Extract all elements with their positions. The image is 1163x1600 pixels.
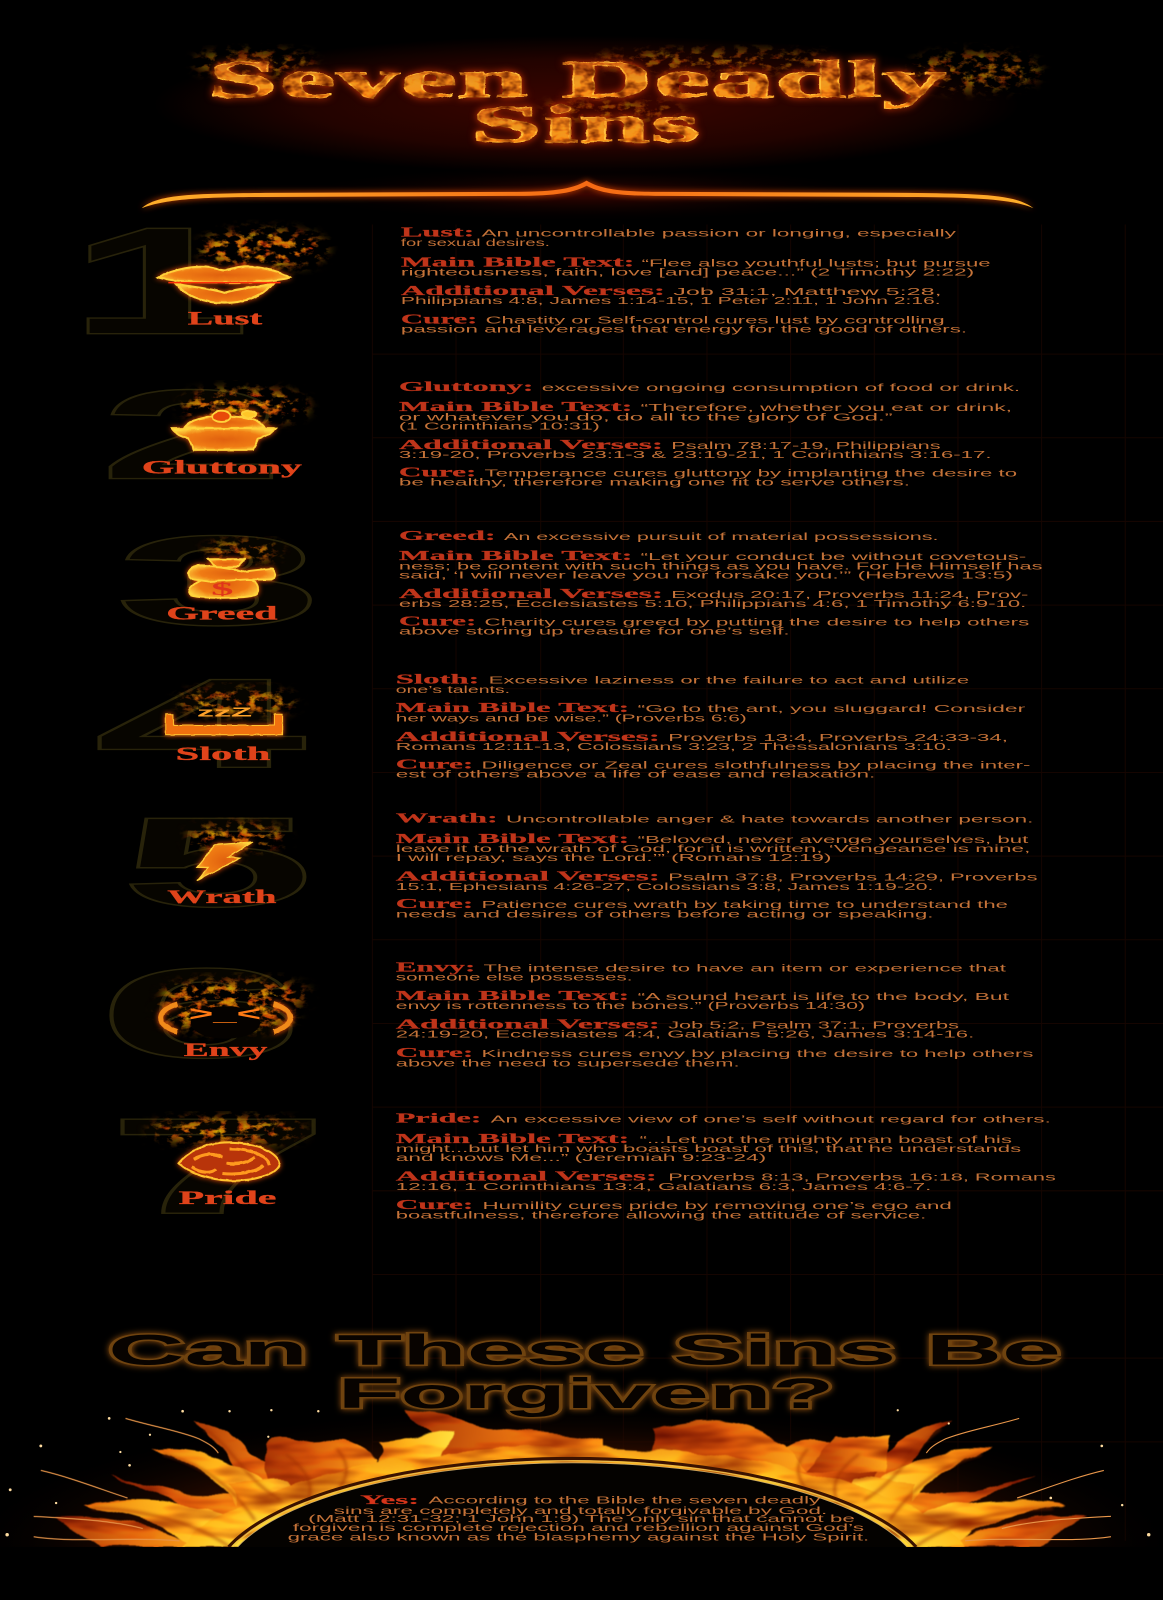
definition: excessive ongoing consumption of food or drink.	[542, 383, 1020, 394]
additional verses: Psalm 78:17-19, Philippians	[671, 441, 941, 452]
additional verses: 15:1, Ephesians 4:26-27, Colossians 3:8, James 1:19-20.	[396, 882, 933, 893]
cure: Patience cures wrath by taking time to understand the	[482, 900, 1009, 911]
main bible text: might...but let him who boasts boast of this, that he understands	[396, 1144, 1021, 1155]
main bible text	[396, 1131, 1021, 1164]
numeral 2: 2	[99, 365, 285, 507]
icon: flaming lips	[158, 231, 326, 303]
main bible text	[399, 399, 1012, 433]
label: Envy	[184, 1040, 268, 1061]
additional verses: Additional Verses:	[399, 586, 663, 601]
main bible text: and knows Me...” (Jeremiah 9:23-24)	[396, 1153, 766, 1164]
definition: one’s talents.	[396, 685, 510, 696]
flaming arch	[0, 1404, 1163, 1547]
label: Wrath	[167, 887, 277, 908]
cure: be healthy, therefore making one fit to serve others.	[399, 478, 910, 489]
cure	[399, 465, 1018, 489]
background grid	[372, 224, 1163, 1541]
cure: est of others above a life of ease and relaxation.	[396, 770, 875, 781]
title	[153, 36, 1041, 173]
answer text: (Matt 12:31-32; 1 John 1:9) The only sin that cannot be	[308, 1514, 856, 1525]
definition	[396, 1110, 1051, 1125]
section 7: pride	[105, 1089, 332, 1242]
inner dark arch	[238, 1463, 907, 1547]
cure: Charity cures greed by putting the desire to help others	[485, 618, 1029, 629]
additional verses: Additional Verses:	[396, 1017, 660, 1032]
icon: flaming cupcake	[171, 390, 308, 450]
cure: Temperance cures gluttony by implanting the desire to	[485, 469, 1018, 480]
definition: The intense desire to have an item or experience that	[484, 963, 1006, 974]
definition: An uncontrollable passion or longing, especially	[482, 229, 958, 240]
label: Gluttony	[142, 457, 303, 478]
main bible text: Main Bible Text:	[396, 1131, 629, 1146]
cure: Diligence or Zeal cures slothfulness by placing the inter-	[482, 760, 1030, 771]
main bible text: I will repay, says the Lord.’” (Romans 12:19)	[396, 853, 831, 864]
cure: Cure:	[399, 614, 476, 629]
main bible text: Main Bible Text:	[396, 831, 629, 846]
text block: sloth	[396, 672, 1030, 781]
additional verses: Job 5:2, Psalm 37:1, Proverbs	[668, 1021, 959, 1032]
text block: pride	[396, 1110, 1056, 1221]
section 1: lust	[67, 196, 326, 367]
additional verses: Proverbs 13:4, Proverbs 24:33-34,	[668, 733, 1008, 744]
icon: flaming lion	[149, 1118, 304, 1181]
main bible text	[399, 548, 1043, 582]
label: Lust	[188, 308, 263, 329]
main bible text: said, ‘I will never leave you nor forsake you.’” (Hebrews 13:5)	[399, 571, 1013, 582]
icon: flaming bed	[165, 690, 296, 735]
cure: Humility cures pride by removing one’s ego and	[483, 1201, 953, 1212]
main bible text: “A sound heart is life to the body, But	[638, 992, 1009, 1003]
numeral 7: 7	[105, 1089, 332, 1242]
additional verses	[396, 869, 1038, 893]
definition: Gluttony:	[399, 379, 534, 394]
additional verses: Additional Verses:	[396, 1169, 657, 1184]
definition: Uncontrollable anger & hate towards another person.	[506, 814, 1033, 825]
main bible text: righteousness, faith, love [and] peace...” (2 Timothy 2:22)	[401, 268, 974, 279]
ornamental divider	[142, 165, 1033, 222]
flame streaks	[92, 1429, 1053, 1547]
closing question	[108, 1326, 1061, 1418]
additional verses	[396, 729, 1008, 753]
cure	[396, 1045, 1033, 1069]
numeral 1: 1	[67, 196, 251, 367]
cure: Cure:	[401, 311, 477, 326]
definition: for sexual desires.	[401, 238, 550, 249]
definition: Sloth:	[396, 672, 479, 687]
text block: wrath	[396, 810, 1038, 920]
main bible text: Main Bible Text:	[396, 700, 629, 715]
additional verses: Proverbs 8:13, Proverbs 16:18, Romans	[668, 1173, 1056, 1184]
cure: Kindness cures envy by placing the desire to help others	[482, 1049, 1033, 1060]
definition: An excessive view of one’s self without regard for others.	[491, 1114, 1051, 1125]
additional verses: Exodus 20:17, Proverbs 11:24, Prov-	[671, 590, 1028, 601]
title glow	[153, 36, 1020, 173]
definition: An excessive pursuit of material possessions.	[504, 532, 939, 543]
main bible text: “Go to the ant, you sluggard! Consider	[638, 704, 1027, 715]
numeral 4: 4	[94, 653, 306, 795]
main bible text: envy is rottenness to the bones.” (Proverbs 14:30)	[396, 1001, 865, 1012]
label: Pride	[179, 1188, 277, 1209]
icon: money bag in hand	[189, 542, 282, 599]
additional verses: Philippians 4:8, James 1:14-15, 1 Peter 2:11, 1 John 2:16.	[401, 296, 941, 307]
main bible text	[396, 831, 1030, 864]
definition	[396, 672, 970, 696]
main bible text: Main Bible Text:	[401, 254, 635, 269]
additional verses: 3:19-20, Proverbs 23:1-3 & 23:19-21, 1 Corinthians 3:16-17.	[399, 450, 992, 461]
additional verses: Romans 12:11-13, Colossians 3:23, 2 Thessalonians 3:10.	[396, 742, 952, 753]
definition: Envy:	[396, 959, 475, 974]
main bible text: (1 Corinthians 10:31)	[399, 422, 600, 433]
icon: flaming bed: zzZ	[197, 704, 252, 719]
text block: gluttony	[399, 379, 1020, 489]
cure: Chastity or Self-control cures lust by controlling	[486, 315, 945, 326]
cure	[396, 756, 1030, 781]
section 6: envy	[98, 943, 308, 1085]
section 3: greed	[114, 510, 323, 652]
main bible text: or whatever you do, do all to the glory of God.”	[399, 412, 894, 423]
cure: needs and desires of others before acting or speaking.	[396, 909, 933, 920]
main bible text: Main Bible Text:	[399, 548, 633, 563]
main bible text	[396, 700, 1027, 724]
flame wisps	[34, 1418, 1111, 1541]
definition: Wrath:	[396, 810, 498, 825]
definition: Pride:	[396, 1110, 482, 1125]
additional verses	[396, 1017, 974, 1041]
definition	[399, 379, 1020, 394]
main bible text: Main Bible Text:	[396, 988, 629, 1003]
icon: lightning bolt	[188, 824, 286, 881]
label: Greed	[166, 603, 278, 624]
additional verses: erbs 28:25, Ecclesiastes 5:10, Philippians 4:6, 1 Timothy 6:9-10.	[399, 599, 1026, 610]
main bible text: “Beloved, never avenge yourselves, but	[638, 835, 1029, 846]
cure: boastfulness, therefore allowing the attitude of service.	[396, 1210, 926, 1221]
cure: above storing up treasure for one’s self.	[399, 627, 790, 638]
additional verses: Additional Verses:	[396, 729, 660, 744]
main bible text: “Therefore, whether you eat or drink,	[641, 403, 1012, 414]
additional verses	[399, 437, 992, 461]
answer text: Yes:	[360, 1493, 419, 1507]
cure: Cure:	[396, 896, 473, 911]
additional verses: Psalm 37:8, Proverbs 14:29, Proverbs	[668, 873, 1038, 884]
cure: Cure:	[396, 756, 473, 771]
definition	[399, 528, 939, 543]
cure	[399, 614, 1029, 638]
answer text: grace also known as the blasphemy against the Holy Spirit.	[288, 1532, 869, 1543]
additional verses: Additional Verses:	[396, 869, 660, 884]
cure	[401, 311, 967, 336]
main bible text	[396, 988, 1009, 1012]
section 5: wrath	[120, 792, 314, 934]
additional verses: 12:16, 1 Corinthians 13:4, Galatians 6:3, James 4:6-7.	[396, 1182, 931, 1193]
cure: above the need to supersede them.	[396, 1058, 740, 1069]
cure: Cure:	[396, 1197, 473, 1212]
cure	[396, 896, 1009, 920]
closing question: Forgiven?	[338, 1370, 835, 1418]
additional verses: 24:19-20, Ecclesiastes 4:4, Galatians 5:26, James 3:14-16.	[396, 1030, 974, 1041]
additional verses	[399, 586, 1028, 610]
answer text: According to the Bible the seven deadly	[428, 1496, 822, 1507]
icon: flaming face: >_<	[189, 1003, 261, 1025]
flame glow	[52, 1426, 1093, 1547]
definition	[396, 959, 1006, 984]
sparks	[5, 1409, 1150, 1536]
arch rim	[229, 1458, 916, 1547]
icon: flaming face	[157, 981, 308, 1039]
title flames	[194, 51, 1041, 119]
definition	[401, 225, 958, 249]
main bible text: leave it to the wrath of God, for it is written, ‘Vengeance is mine,	[396, 844, 1030, 855]
section 2: gluttony	[99, 365, 308, 507]
flame tongues	[55, 1410, 1090, 1547]
additional verses: Additional Verses:	[401, 283, 665, 298]
additional verses: Job 31:1, Matthew 5:28,	[673, 287, 942, 298]
main bible text: Main Bible Text:	[399, 399, 633, 414]
text block: lust	[401, 225, 991, 336]
text block: greed	[399, 528, 1043, 638]
main bible text	[401, 254, 991, 279]
text block: envy	[396, 959, 1033, 1069]
additional verses	[396, 1169, 1056, 1193]
definition	[396, 810, 1033, 825]
numeral 5: 5	[120, 792, 314, 934]
answer text	[288, 1493, 869, 1543]
section 4: sloth	[94, 653, 306, 795]
title text: Seven Deadly	[207, 51, 947, 109]
cure: passion and leverages that energy for the good of others.	[401, 325, 967, 336]
additional verses	[401, 283, 942, 307]
cure: Cure:	[396, 1045, 473, 1060]
closing question: Can These Sins Be	[108, 1326, 1061, 1374]
definition: Greed:	[399, 528, 496, 543]
main bible text: her ways and be wise.” (Proverbs 6:6)	[396, 713, 747, 724]
additional verses: Additional Verses:	[399, 437, 663, 452]
answer text: forgiven is complete rejection and rebellion against God’s	[293, 1523, 864, 1534]
numeral 6: 6	[98, 943, 304, 1085]
definition: someone else possesses.	[396, 973, 633, 984]
icon: money bag in hand: $	[211, 579, 234, 599]
main bible text: “Let your conduct be without covetous-	[641, 552, 1026, 563]
cure	[396, 1197, 953, 1221]
definition: Excessive laziness or the failure to act and utilize	[489, 676, 970, 687]
main bible text: “...Let not the mighty man boast of his	[640, 1135, 1012, 1146]
main bible text: “Flee also youthful lusts; but pursue	[642, 258, 991, 269]
main bible text: ness; be content with such things as you have. For He Himself has	[399, 561, 1043, 572]
answer text: sins are completely and totally forgivable by God.	[334, 1506, 827, 1517]
cure: Cure:	[399, 465, 476, 480]
numeral 3: 3	[114, 510, 323, 652]
title: Sins	[470, 96, 701, 154]
label: Sloth	[175, 744, 271, 765]
definition: Lust:	[401, 225, 474, 240]
